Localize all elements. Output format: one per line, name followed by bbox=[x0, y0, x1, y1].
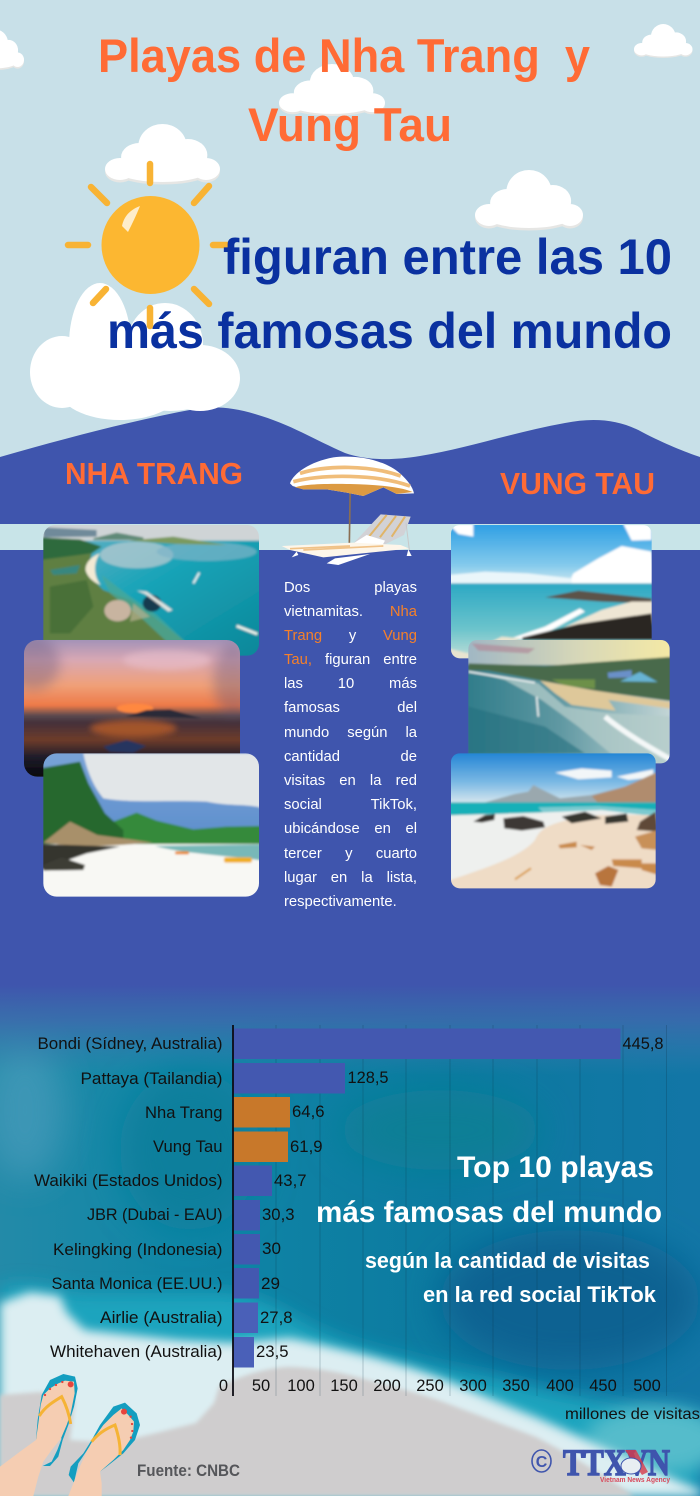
axis tick labels: 300 bbox=[459, 1377, 487, 1395]
category labels: Pattaya (Tailandia) bbox=[80, 1069, 222, 1088]
axis tick labels bbox=[219, 1377, 661, 1395]
chart heading bbox=[316, 1151, 662, 1307]
cloud: top right bbox=[634, 24, 692, 58]
bar chart bbox=[34, 1025, 700, 1423]
category labels: Airlie (Australia) bbox=[100, 1308, 222, 1327]
photos: Nha Trang bbox=[7, 523, 263, 901]
logo: TTXVN: C bbox=[536, 1454, 548, 1471]
photo: rocks bbox=[448, 750, 658, 892]
value labels: 61,9 bbox=[290, 1137, 322, 1156]
photo: sea and sky bbox=[448, 523, 655, 660]
category labels: Santa Monica (EE.UU.) bbox=[52, 1274, 222, 1293]
axis tick labels: 0 bbox=[219, 1377, 228, 1395]
axis tick labels: 200 bbox=[373, 1377, 401, 1395]
photo: white sand bbox=[40, 750, 263, 901]
chart heading: según la cantidad de visitas bbox=[365, 1248, 650, 1273]
subtitle: dark blue: más famosas del mundo bbox=[107, 303, 672, 359]
cloud: top left bbox=[0, 30, 24, 70]
cloud: behind sun bbox=[105, 124, 220, 184]
axis tick labels: 150 bbox=[330, 1377, 358, 1395]
text block: description bbox=[284, 580, 417, 910]
text block: description: visitas en la red bbox=[284, 773, 417, 789]
photos: Vung Tau bbox=[448, 523, 675, 892]
icon: sun lounger bbox=[282, 514, 412, 565]
axis tick labels: 450 bbox=[589, 1377, 617, 1395]
cloud: centre behind title bbox=[279, 64, 385, 116]
value labels: 30 bbox=[262, 1239, 281, 1258]
axis tick labels: 400 bbox=[546, 1377, 574, 1395]
subtitle: dark blue bbox=[107, 229, 672, 359]
value labels: 445,8 bbox=[622, 1034, 664, 1053]
icon: beach umbrella bbox=[290, 457, 414, 543]
category labels: Nha Trang bbox=[145, 1103, 222, 1122]
heading: Nha Trang: NHA TRANG bbox=[65, 456, 243, 491]
text block: description: lugar en la lista, bbox=[284, 870, 417, 886]
photo: coast bbox=[465, 637, 675, 767]
axis tick labels: 50 bbox=[252, 1377, 270, 1395]
logo: TTXVN: Vietnam News Agency bbox=[600, 1477, 670, 1484]
logo: TTXVN bbox=[532, 1443, 670, 1484]
photo: aerial bay bbox=[40, 523, 263, 660]
background: sky bbox=[0, 0, 700, 530]
subtitle: dark blue: figuran entre las 10 bbox=[223, 229, 672, 285]
text block: description: Tau, figuran entre bbox=[284, 652, 417, 668]
light strip bbox=[0, 524, 700, 550]
cloud: right bbox=[475, 170, 583, 230]
text block: description: ubicándose en el bbox=[284, 821, 417, 837]
icon: feet in flip-flops bbox=[0, 1374, 140, 1496]
photo: sunset bbox=[24, 640, 240, 777]
title: orange bbox=[98, 29, 590, 151]
category labels bbox=[34, 1034, 222, 1361]
category labels: Waikiki (Estados Unidos) bbox=[34, 1171, 222, 1190]
category labels: Kelingking (Indonesia) bbox=[53, 1240, 222, 1259]
chart heading: Top 10 playas bbox=[457, 1151, 654, 1184]
value labels: 43,7 bbox=[274, 1171, 306, 1190]
axis tick labels: 500 bbox=[633, 1377, 661, 1395]
ocean background bbox=[0, 985, 700, 1496]
text block: description: social TikTok, bbox=[284, 797, 417, 813]
value labels: 64,6 bbox=[292, 1102, 324, 1121]
category labels: Whitehaven (Australia) bbox=[50, 1342, 222, 1361]
value labels: 128,5 bbox=[348, 1068, 388, 1087]
value labels: 23,5 bbox=[256, 1342, 288, 1361]
category labels: JBR (Dubai - EAU) bbox=[87, 1205, 222, 1224]
title: orange: Playas de Nha Trang y bbox=[98, 29, 590, 82]
big white cloud bbox=[30, 283, 240, 420]
chart heading: en la red social TikTok bbox=[423, 1282, 657, 1307]
text block: description: mundo según la bbox=[284, 725, 417, 741]
text block: description: respectivamente. bbox=[284, 894, 397, 910]
icon: sun bbox=[68, 164, 228, 326]
axis tick labels: 100 bbox=[287, 1377, 315, 1395]
axis tick labels: 350 bbox=[502, 1377, 530, 1395]
value labels: 29 bbox=[261, 1274, 280, 1293]
source: Fuente: CNBC bbox=[137, 1462, 240, 1480]
category labels: Bondi (Sídney, Australia) bbox=[38, 1034, 222, 1053]
axis tick labels: 250 bbox=[416, 1377, 444, 1395]
chart axis bbox=[232, 1025, 234, 1396]
logo: TTXVN: TTXVN bbox=[563, 1443, 670, 1484]
text block: description: Trang y Vung bbox=[284, 628, 417, 644]
bars bbox=[233, 1028, 620, 1368]
mountain and blue band bbox=[0, 407, 700, 524]
value labels bbox=[256, 1034, 664, 1361]
text block: description: tercer y cuarto bbox=[284, 846, 417, 862]
text block: description: cantidad de bbox=[284, 749, 417, 765]
axis unit: millones de visitas bbox=[565, 1406, 700, 1423]
value labels: 30,3 bbox=[262, 1205, 294, 1224]
chart heading: más famosas del mundo bbox=[316, 1196, 662, 1229]
text block: description: las 10 más bbox=[284, 676, 417, 692]
text block: description: Dos playas bbox=[284, 580, 417, 596]
category labels: Vung Tau bbox=[153, 1137, 222, 1156]
blue panel bbox=[0, 550, 700, 1000]
title: orange: Vung Tau bbox=[248, 98, 452, 151]
text block: description: vietnamitas. Nha bbox=[284, 604, 417, 620]
text block: description: famosas del bbox=[284, 700, 417, 716]
heading: Vung Tau: VUNG TAU bbox=[500, 466, 655, 501]
value labels: 27,8 bbox=[260, 1308, 292, 1327]
